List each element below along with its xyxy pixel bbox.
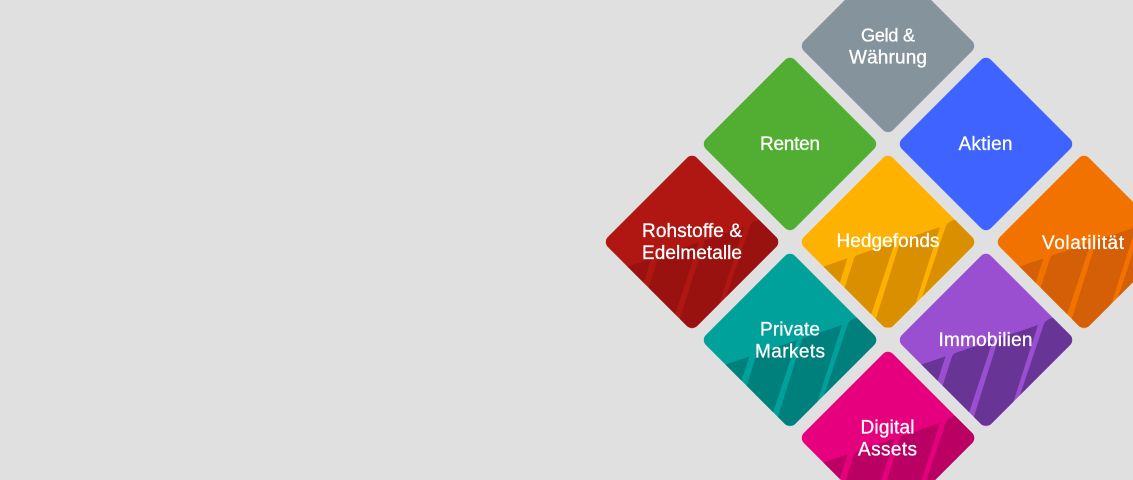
- tile: Private Markets: Markets: [755, 342, 825, 362]
- tile: Aktien: [897, 55, 1075, 233]
- tile: Hedgefonds: Hedgefonds: [836, 231, 940, 252]
- tile: Immobilien: [900, 254, 1072, 426]
- tile: Immobilien: Immobilien: [938, 330, 1032, 351]
- tile: Rohstoffe & Edelmetalle: [606, 156, 778, 328]
- tile: Rohstoffe & Edelmetalle: Edelmetalle: [642, 243, 742, 264]
- tile: Geld & Währung: [799, 0, 977, 135]
- tile: Volatilität: Volatilität: [1042, 233, 1125, 254]
- tile: Renten: [701, 55, 879, 233]
- tile: Digital Assets: Digital: [860, 418, 914, 438]
- diamond grid infographic: [606, 0, 1133, 480]
- tile: Digital Assets: Assets: [858, 440, 917, 460]
- tile: Private Markets: Private: [760, 320, 820, 340]
- tile: Digital Assets: [802, 352, 974, 480]
- tile: Private Markets: [704, 254, 876, 426]
- tile: Hedgefonds: [802, 156, 974, 328]
- tile: Geld & Währung: Geld &: [861, 26, 915, 46]
- tile: Renten: Renten: [760, 134, 820, 155]
- tile: Volatilität: [995, 153, 1133, 331]
- tile: Rohstoffe & Edelmetalle: Rohstoffe &: [642, 221, 742, 242]
- tile: Geld & Währung: Währung: [849, 48, 927, 68]
- tile: Aktien: Aktien: [958, 134, 1012, 155]
